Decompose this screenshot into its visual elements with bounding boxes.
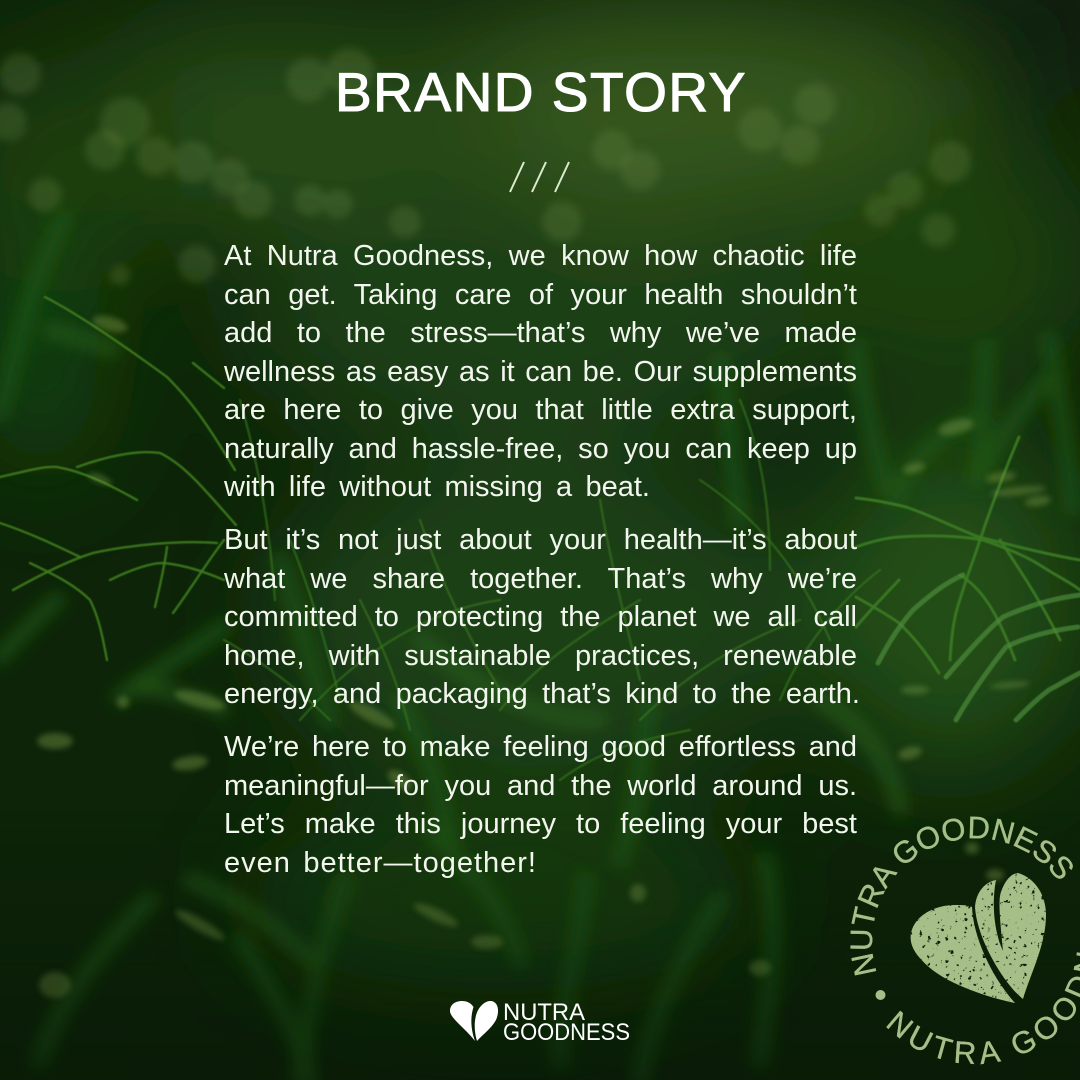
logo wordmark xyxy=(503,999,630,1046)
paragraph 2: committed to protecting the planet we all call xyxy=(224,601,857,633)
bokeh highlights xyxy=(0,48,971,285)
stamp ring text: NUTRA GOODNESS xyxy=(850,816,1073,976)
logo wordmark: NUTRA xyxy=(503,999,585,1026)
logo heart icon xyxy=(450,1001,498,1041)
paragraph 2: energy, and packaging that’s kind to the earth. xyxy=(224,678,860,710)
paragraph 2: what we share together. That’s why we’re xyxy=(224,562,857,594)
paragraph 1: are here to give you that little extra support, xyxy=(224,394,857,426)
paragraph 3: even better—together! xyxy=(224,846,537,878)
stamp heart icon xyxy=(911,873,1046,1003)
out-of-focus highlights xyxy=(37,313,1052,998)
stamp dot xyxy=(876,990,886,1000)
body text: brand story paragraphs xyxy=(224,240,860,878)
divider: three slashes xyxy=(509,162,570,192)
paragraph 1: with life without missing a beat. xyxy=(224,471,650,503)
paragraph 2: home, with sustainable practices, renewable xyxy=(224,640,857,672)
paragraph 2: But it’s not just about your health—it’s about xyxy=(224,524,857,556)
title: BRAND STORY: BRAND STORY xyxy=(335,61,747,123)
paragraph 3: meaningful—for you and the world around us. xyxy=(224,770,857,802)
paragraph 1: naturally and hassle-free, so you can keep up xyxy=(224,432,857,464)
paragraph 3 xyxy=(224,731,857,878)
grass blades near layer xyxy=(0,297,1080,780)
paragraph 1: At Nutra Goodness, we know how chaotic life xyxy=(224,240,857,272)
paragraph 3: Let’s make this journey to feeling your best xyxy=(224,808,857,840)
paragraph 3: We’re here to make feeling good effortless and xyxy=(224,731,857,763)
grass blades far layer xyxy=(0,220,1073,1080)
paragraph 1: can get. Taking care of your health shouldn’t xyxy=(224,278,857,310)
paragraph 1 xyxy=(224,240,857,503)
paragraph 1: add to the stress—that’s why we’ve made xyxy=(224,317,857,349)
paragraph 1: wellness as easy as it can be. Our supplements xyxy=(224,356,857,388)
logo: Nutra Goodness xyxy=(450,999,630,1045)
stamp: circular Nutra Goodness seal xyxy=(850,816,1080,1064)
paragraph 2 xyxy=(224,524,860,710)
